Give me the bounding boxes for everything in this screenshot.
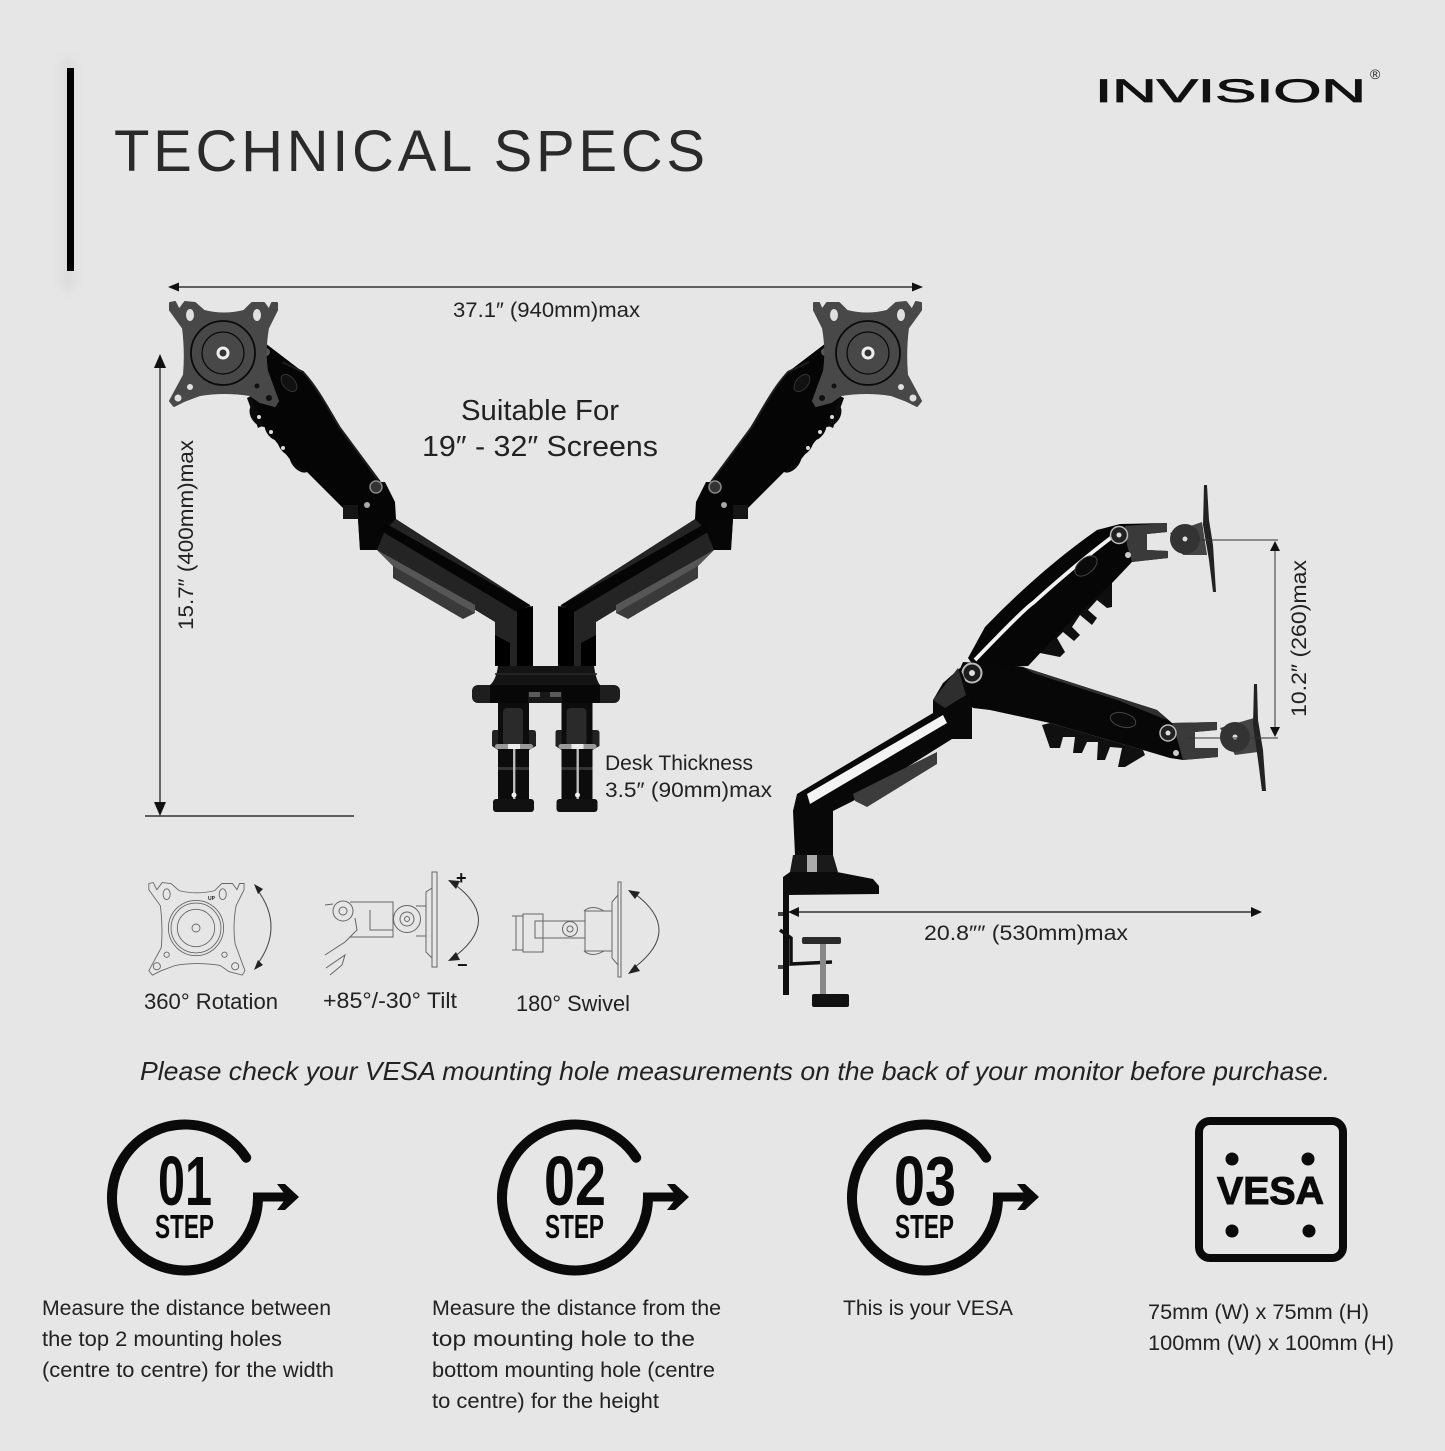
step 3 text: This is your VESA	[843, 1297, 1013, 1320]
VESA sizes text: 75mm (W) x 75mm (H)	[1148, 1301, 1369, 1324]
arm spacing label: 10.2″ (260)max	[1288, 559, 1311, 717]
bottom monitor plate	[1220, 684, 1266, 791]
desk thickness text: 3.5″ (90mm)max	[605, 779, 773, 802]
step 3 icon: 03	[894, 1142, 956, 1220]
step 2 icon: 02	[544, 1142, 606, 1220]
step 3 icon	[852, 1124, 1039, 1270]
tilt icon	[325, 868, 478, 975]
step 1 icon: STEP	[155, 1208, 214, 1245]
dual monitor arm side view	[778, 485, 1266, 1007]
swivel icon	[512, 882, 659, 977]
step 2 text	[432, 1297, 721, 1413]
step 1 text: the top 2 mounting holes	[42, 1328, 282, 1351]
top monitor plate	[1170, 485, 1216, 592]
tilt icon: −	[457, 955, 468, 975]
step 3 icon: STEP	[895, 1208, 954, 1245]
brand logo: INVISION	[1095, 73, 1366, 109]
step 1 text: (centre to centre) for the width	[42, 1359, 334, 1382]
VESA sizes text	[1148, 1301, 1394, 1355]
title accent bar	[62, 60, 74, 290]
VESA icon	[1199, 1121, 1343, 1258]
step 2 text: bottom mounting hole (centre	[432, 1359, 715, 1382]
reach dimension arrow	[788, 907, 1262, 917]
width dimension arrow	[168, 282, 923, 292]
rotation label: 360° Rotation	[144, 989, 278, 1014]
arm details	[278, 371, 300, 395]
title: TECHNICAL SPECS	[114, 119, 705, 184]
right arm	[558, 302, 921, 666]
width dimension label: 37.1″ (940mm)max	[453, 299, 641, 322]
suitable screens text: Suitable For	[461, 395, 619, 427]
upper arm	[252, 343, 396, 519]
arm spacing dimension arrow	[1187, 540, 1280, 738]
suitable screens text	[422, 395, 658, 463]
lower spring arm	[958, 662, 1218, 767]
height dimension arrow	[145, 354, 354, 816]
bracket and lower arm	[358, 519, 533, 666]
VESA icon: VESA	[1217, 1170, 1324, 1213]
step 2 text: to centre) for the height	[432, 1390, 659, 1413]
brand logo	[1095, 66, 1381, 109]
tilt icon: +	[456, 868, 467, 888]
rotation icon: UP	[208, 896, 216, 902]
suitable screens text: 19″ - 32″ Screens	[422, 431, 658, 463]
step 2 text: top mounting hole to the	[432, 1328, 695, 1351]
clamp base flange	[472, 666, 620, 703]
swivel label: 180° Swivel	[516, 991, 630, 1016]
step 1 text: Measure the distance between	[42, 1297, 331, 1320]
brand logo: ®	[1370, 66, 1381, 82]
reach dimension label: 20.8″″ (530mm)max	[924, 922, 1129, 945]
main arm and joint	[793, 668, 972, 855]
VESA sizes text: 100mm (W) x 100mm (H)	[1148, 1332, 1394, 1355]
rotation icon	[149, 883, 271, 975]
dual monitor arm front view	[170, 302, 921, 812]
spring fingers	[245, 390, 315, 477]
height dimension label: 15.7″ (400mm)max	[175, 439, 198, 630]
step 2 icon	[502, 1124, 689, 1270]
VESA notice: Please check your VESA mounting hole measurements on the back of your monitor before purchase.	[140, 1056, 1330, 1086]
desk clamp columns	[492, 703, 600, 812]
desk thickness text: Desk Thickness	[605, 752, 753, 775]
desk thickness text	[605, 752, 773, 802]
step 1 text	[42, 1297, 334, 1382]
step 2 text: Measure the distance from the	[432, 1297, 721, 1320]
desk clamp	[778, 855, 879, 1007]
upper arm	[968, 523, 1168, 668]
step 1 icon: 01	[158, 1142, 212, 1220]
step 1 icon	[112, 1124, 299, 1270]
mounting plate	[170, 302, 278, 406]
tilt label: +85°/-30° Tilt	[323, 988, 457, 1013]
step 2 icon: STEP	[545, 1208, 604, 1245]
left arm	[170, 302, 533, 666]
